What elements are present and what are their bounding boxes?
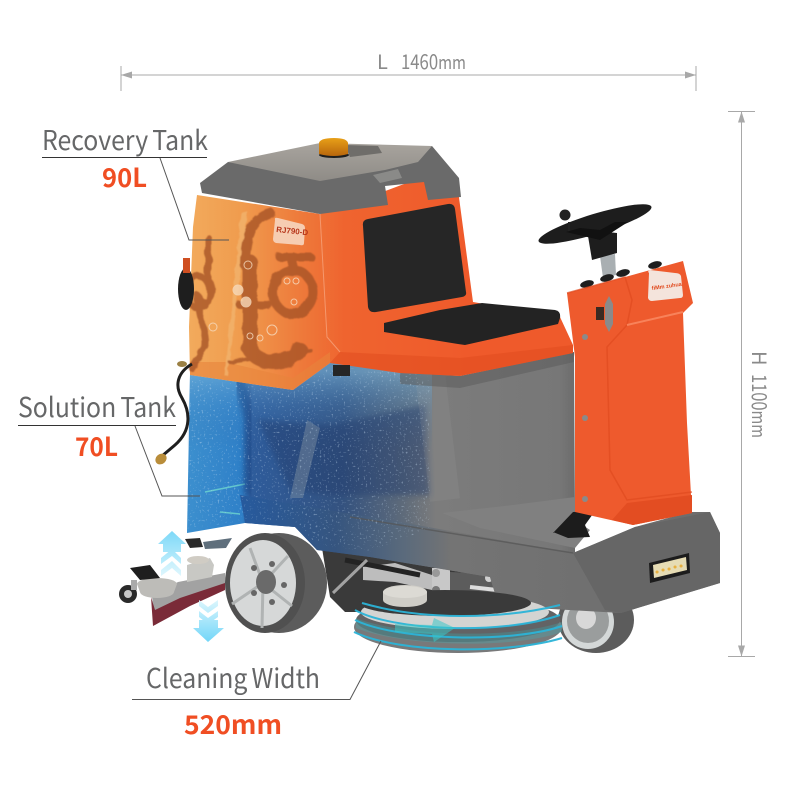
lower tank shade	[330, 345, 573, 376]
black bracket	[333, 365, 350, 376]
solution tank callout: 70L	[75, 427, 118, 464]
disc brush	[354, 585, 562, 653]
beacon	[319, 138, 349, 158]
seat cushion	[384, 303, 560, 345]
footboard	[442, 497, 590, 548]
light bar	[649, 553, 690, 583]
pillar buttons	[579, 260, 663, 289]
cleaning width callout: 520mm	[184, 705, 282, 742]
solution tank callout	[18, 386, 200, 496]
pillar brand plate: fiMm zuhua	[651, 282, 683, 292]
control pillar	[567, 261, 693, 525]
base corner shading	[573, 512, 720, 613]
under-body mechanism	[322, 548, 505, 612]
internal tank shading	[205, 374, 445, 514]
band line	[350, 517, 573, 553]
cleaning width callout: Cleaning Width	[146, 657, 320, 696]
tank edge light	[320, 214, 340, 352]
recovery tank callout	[42, 119, 229, 240]
lid	[200, 143, 461, 214]
length dimension: 1460mm	[401, 46, 466, 75]
arrow up	[158, 531, 186, 576]
height dimension	[728, 111, 775, 656]
arrow down	[193, 600, 224, 642]
cleaning width callout	[132, 641, 381, 742]
internal pipes	[187, 212, 313, 376]
steering wheel	[536, 197, 654, 251]
pillar brand plate	[648, 270, 683, 301]
hose and connector	[153, 258, 194, 467]
bottom band of tank	[190, 352, 330, 390]
squeegee assembly	[119, 538, 232, 626]
lid recess	[345, 145, 382, 157]
shadow under seat base	[400, 352, 574, 388]
length dimension	[121, 46, 696, 91]
pillar details	[567, 277, 692, 525]
water highlight	[187, 363, 432, 450]
recovery tank callout: Recovery Tank	[42, 119, 208, 158]
height dimension: 1100mm	[746, 374, 775, 438]
pedal	[553, 511, 595, 538]
tank label: RJ790-D	[276, 225, 309, 237]
body tank	[187, 352, 575, 610]
recovery tank	[189, 178, 573, 390]
steering column	[587, 230, 617, 278]
tank label	[273, 218, 309, 245]
solution tank callout: Solution Tank	[18, 386, 176, 425]
bubbles	[209, 261, 299, 341]
length dimension: L	[377, 46, 388, 75]
scrubber machine	[119, 138, 720, 653]
recovery tank callout: 90L	[102, 158, 147, 195]
back panel	[363, 204, 466, 312]
height dimension: H	[746, 351, 775, 366]
base chassis	[240, 495, 720, 613]
front wheel	[225, 533, 327, 633]
water speckle	[187, 366, 430, 552]
cyan swirl lines	[354, 603, 562, 649]
rear wheel	[558, 587, 634, 653]
